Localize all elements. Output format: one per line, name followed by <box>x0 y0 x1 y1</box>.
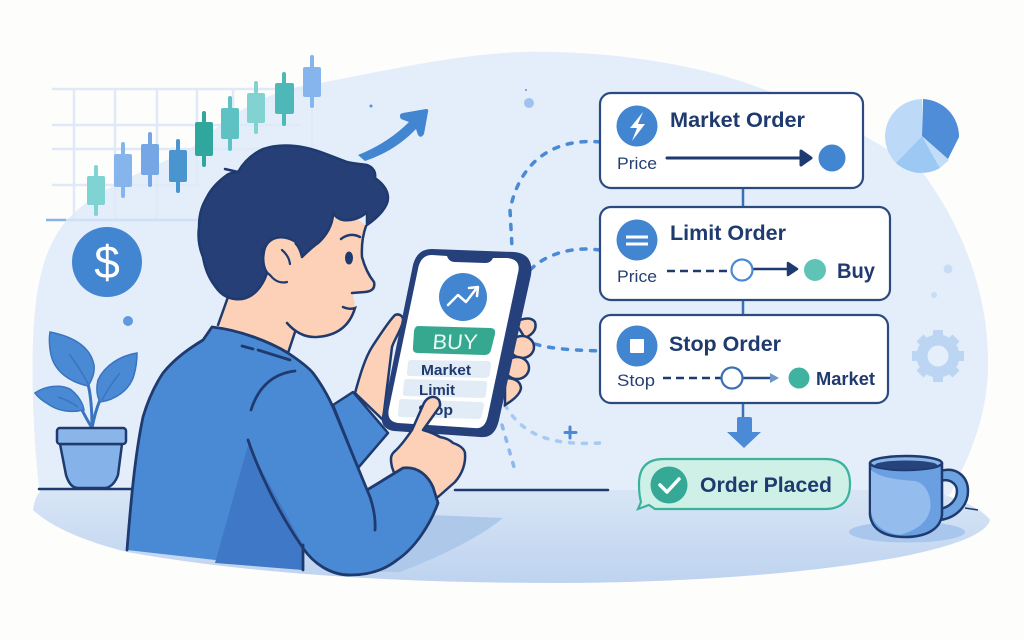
eyebrow and eye <box>341 235 360 264</box>
badge: order placed <box>638 459 850 509</box>
icon: rising arrow <box>358 109 428 161</box>
far hand <box>355 314 403 420</box>
chart grid <box>46 89 312 220</box>
label: price: Price <box>617 267 657 286</box>
connector lines <box>742 188 744 420</box>
ear <box>263 237 300 282</box>
candlestick chart <box>87 55 321 216</box>
option: stop: Stop <box>418 402 453 419</box>
far sleeve <box>333 392 388 468</box>
arrow <box>753 263 797 275</box>
buy button: BUY <box>432 331 479 354</box>
right hand fingers <box>505 318 536 405</box>
icon: gear <box>912 330 964 382</box>
option: market: Market <box>421 362 471 379</box>
torso and arm <box>127 327 438 575</box>
arrow <box>743 377 772 379</box>
pointing hand <box>391 397 465 497</box>
dashed path <box>663 377 721 379</box>
icon: lightning <box>616 106 658 146</box>
dot <box>818 144 846 172</box>
trigger ring <box>722 368 742 388</box>
table shadow <box>330 515 503 572</box>
option: market <box>407 360 491 379</box>
face outline <box>218 226 374 353</box>
title: Stop Order <box>669 333 781 356</box>
label: market: Market <box>816 369 875 389</box>
label: Order Placed <box>700 474 832 497</box>
option: limit <box>403 379 487 399</box>
panel: stop order <box>600 315 888 403</box>
table <box>33 490 990 583</box>
arrow down <box>727 417 761 448</box>
icon: plus <box>565 427 576 438</box>
table line <box>39 489 608 490</box>
pie chart <box>885 99 959 173</box>
icon: stop square <box>616 326 658 366</box>
icon: dollar coin: $ <box>94 236 120 288</box>
option: limit: Limit <box>419 382 455 399</box>
label: price: Price <box>617 154 657 173</box>
icon: dollar coin <box>72 227 142 297</box>
label: buy: Buy <box>837 260 875 283</box>
plant <box>35 332 137 488</box>
title: Limit Order <box>670 222 786 245</box>
icon: bars <box>616 220 658 260</box>
panel: market order <box>600 93 863 188</box>
icon: check <box>650 466 688 504</box>
dot <box>804 259 826 281</box>
background blob <box>33 52 988 495</box>
small dots <box>98 89 952 520</box>
dotted connectors <box>502 142 600 474</box>
head and neck skin <box>218 200 374 355</box>
title: Market Order <box>670 109 805 132</box>
dot <box>788 368 810 388</box>
option: stop <box>398 399 484 419</box>
phone <box>382 249 531 437</box>
buy button <box>413 326 495 355</box>
icon: trend chart <box>439 273 487 321</box>
dashed path <box>667 270 730 272</box>
hair tuft <box>225 169 238 172</box>
trigger ring <box>732 260 752 280</box>
arrow <box>667 151 811 165</box>
hair <box>198 145 388 299</box>
coffee mug <box>849 456 978 542</box>
panel: limit order <box>600 207 890 300</box>
label: stop: Stop <box>617 371 655 390</box>
